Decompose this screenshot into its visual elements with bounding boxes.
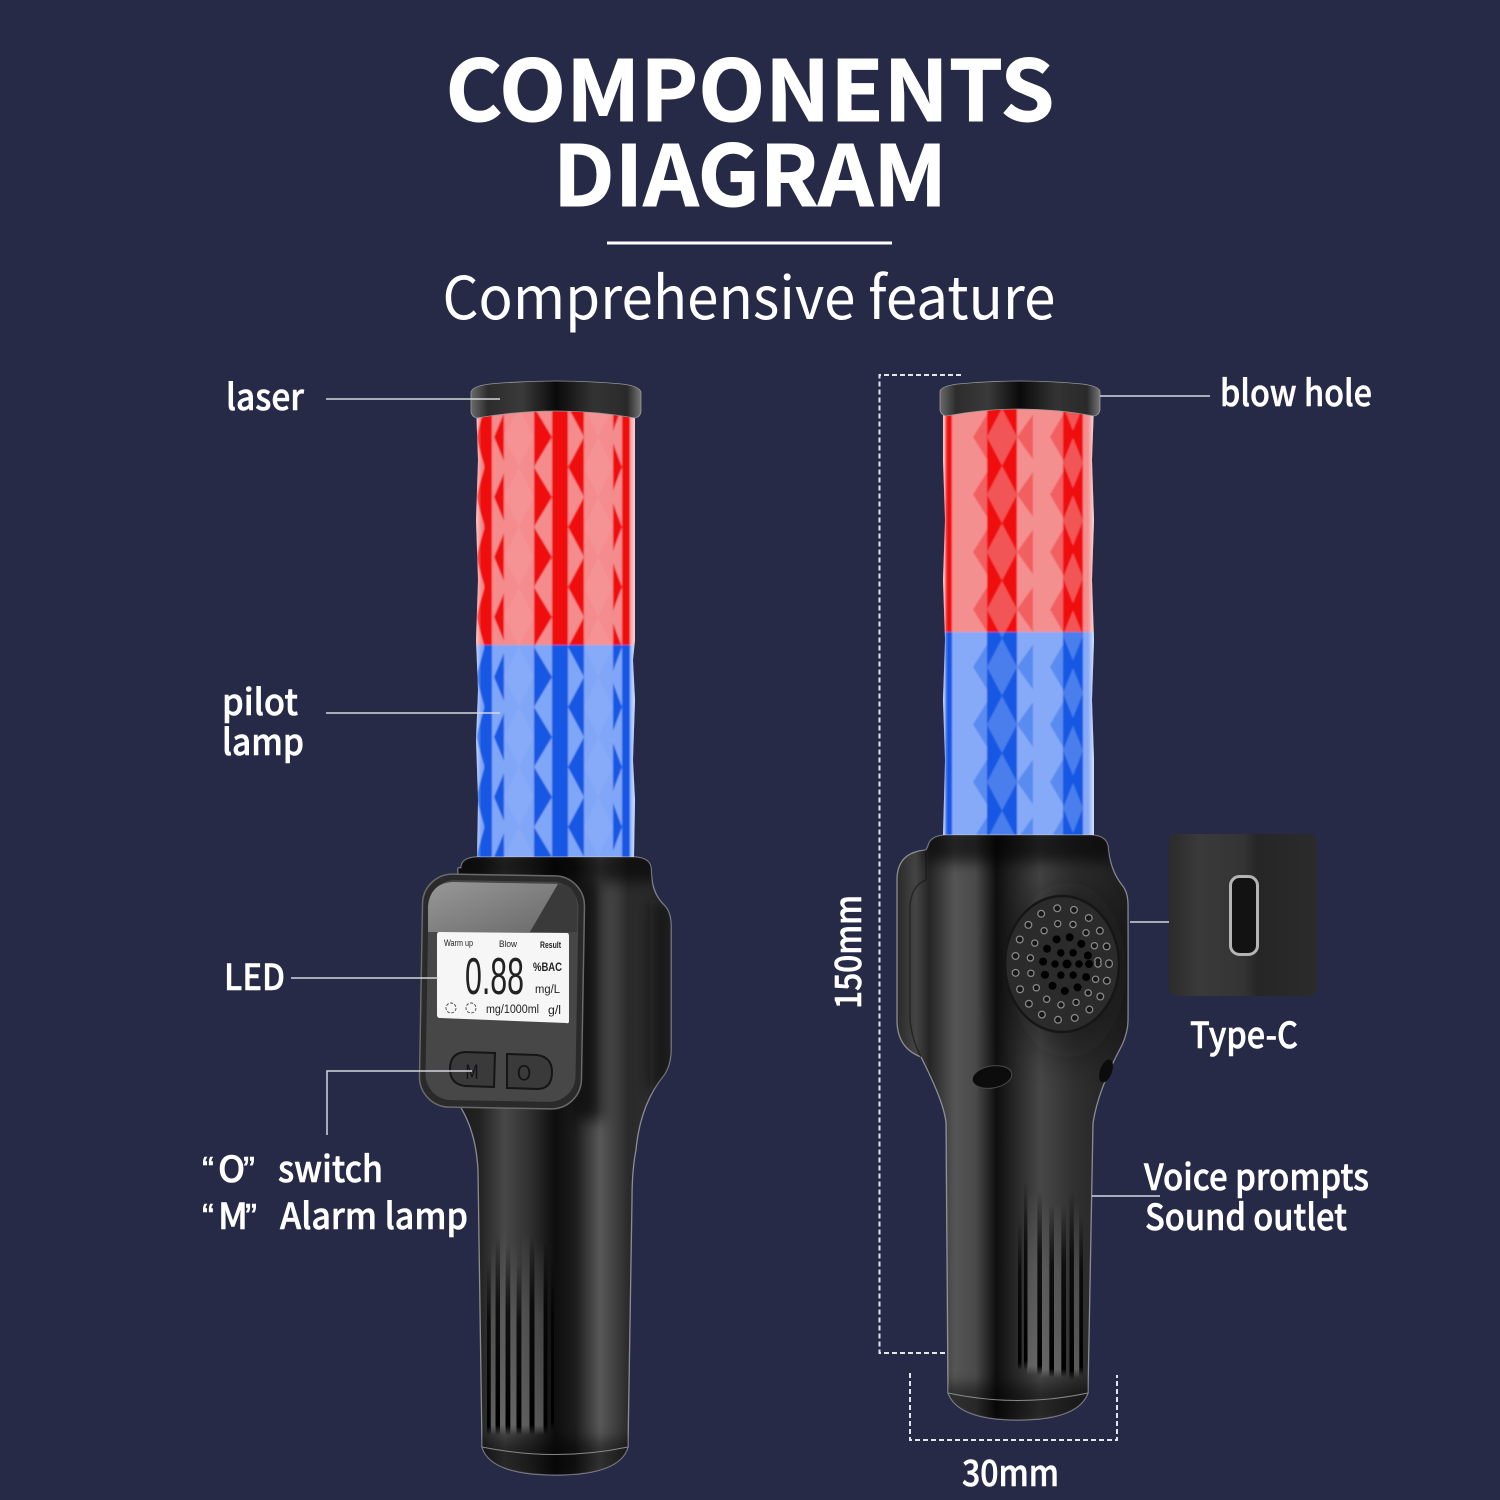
title: DIAGRAM bbox=[553, 110, 947, 231]
label: voice prompts sound outlet: Voice prompts bbox=[1143, 1149, 1369, 1201]
right handle shading bbox=[925, 828, 1126, 1425]
front control panel bbox=[419, 874, 585, 1109]
speaker grille bbox=[1005, 896, 1119, 1032]
glass dark corner bbox=[530, 884, 577, 932]
left device: front view bbox=[419, 381, 675, 1480]
label: laser: laser bbox=[226, 369, 304, 421]
title bbox=[446, 25, 1054, 231]
LCD screen: Result bbox=[540, 940, 561, 950]
left handle shading bbox=[455, 850, 675, 1480]
right cap bbox=[940, 381, 1100, 416]
O button bbox=[507, 1054, 552, 1089]
label: blow hole: blow hole bbox=[1220, 365, 1372, 417]
M button bbox=[450, 1052, 495, 1087]
O button: O bbox=[517, 1057, 531, 1086]
left handle body bbox=[458, 857, 671, 1475]
label: O switch and M alarm lamp: ” bbox=[245, 1196, 257, 1237]
dimension: 150mm height bbox=[820, 375, 961, 1353]
label: voice prompts sound outlet: Sound outlet bbox=[1145, 1189, 1347, 1241]
right tube bbox=[938, 400, 1100, 838]
LCD screen: 0.88 bbox=[465, 948, 524, 1006]
title underline bbox=[607, 242, 892, 244]
left handle base line bbox=[482, 1447, 628, 1454]
subtitle: Comprehensive feature bbox=[442, 251, 1056, 336]
right handle base line bbox=[948, 1393, 1088, 1400]
Type-C port inset bbox=[1169, 834, 1317, 996]
LCD screen: Blow bbox=[499, 939, 517, 949]
label: Type-C: Type-C bbox=[1190, 1007, 1298, 1059]
label: LED: LED bbox=[224, 949, 285, 1001]
label: pilot lamp: lamp bbox=[222, 714, 304, 766]
M button: M bbox=[465, 1056, 479, 1085]
right handle body bbox=[897, 835, 1128, 1420]
dimension: 30mm width bbox=[910, 1373, 1117, 1497]
leader lines bbox=[291, 396, 1210, 1196]
vent hole bbox=[970, 1063, 1014, 1091]
label: O switch and M alarm lamp: Alarm lamp bbox=[280, 1188, 468, 1240]
label: pilot lamp bbox=[222, 674, 304, 766]
right grip flutes bbox=[1018, 1180, 1083, 1380]
side hole bbox=[1096, 1058, 1116, 1084]
LCD screen: mg/L bbox=[535, 984, 561, 996]
label: O switch and M alarm lamp bbox=[202, 1141, 468, 1240]
LCD screen: %BAC bbox=[533, 962, 562, 974]
right device: back view bbox=[897, 381, 1128, 1425]
label: O switch and M alarm lamp: “ bbox=[202, 1149, 214, 1190]
left tube bbox=[470, 400, 640, 860]
label: O switch and M alarm lamp: ” bbox=[243, 1149, 255, 1190]
left cap bbox=[471, 381, 641, 418]
LCD screen: mg/1000ml bbox=[486, 1004, 539, 1016]
dimension: 150mm height: 150mm bbox=[820, 895, 872, 1009]
label: pilot lamp: pilot bbox=[222, 674, 298, 726]
right side panel edge bbox=[910, 850, 926, 1057]
dimension: 30mm width: 30mm bbox=[962, 1445, 1059, 1497]
glass highlight bbox=[428, 882, 558, 932]
label: O switch and M alarm lamp: “ bbox=[202, 1196, 214, 1237]
LCD screen: g/l bbox=[548, 1005, 561, 1017]
label: O switch and M alarm lamp: O bbox=[218, 1141, 245, 1193]
label: O switch and M alarm lamp: M bbox=[218, 1188, 248, 1240]
label: O switch and M alarm lamp: switch bbox=[278, 1141, 383, 1193]
left grip flutes bbox=[487, 1230, 554, 1435]
LCD screen bbox=[437, 932, 569, 1023]
title: COMPONENTS bbox=[446, 25, 1054, 146]
LCD screen: Warm up bbox=[444, 938, 473, 948]
label: voice prompts sound outlet bbox=[1143, 1149, 1369, 1241]
